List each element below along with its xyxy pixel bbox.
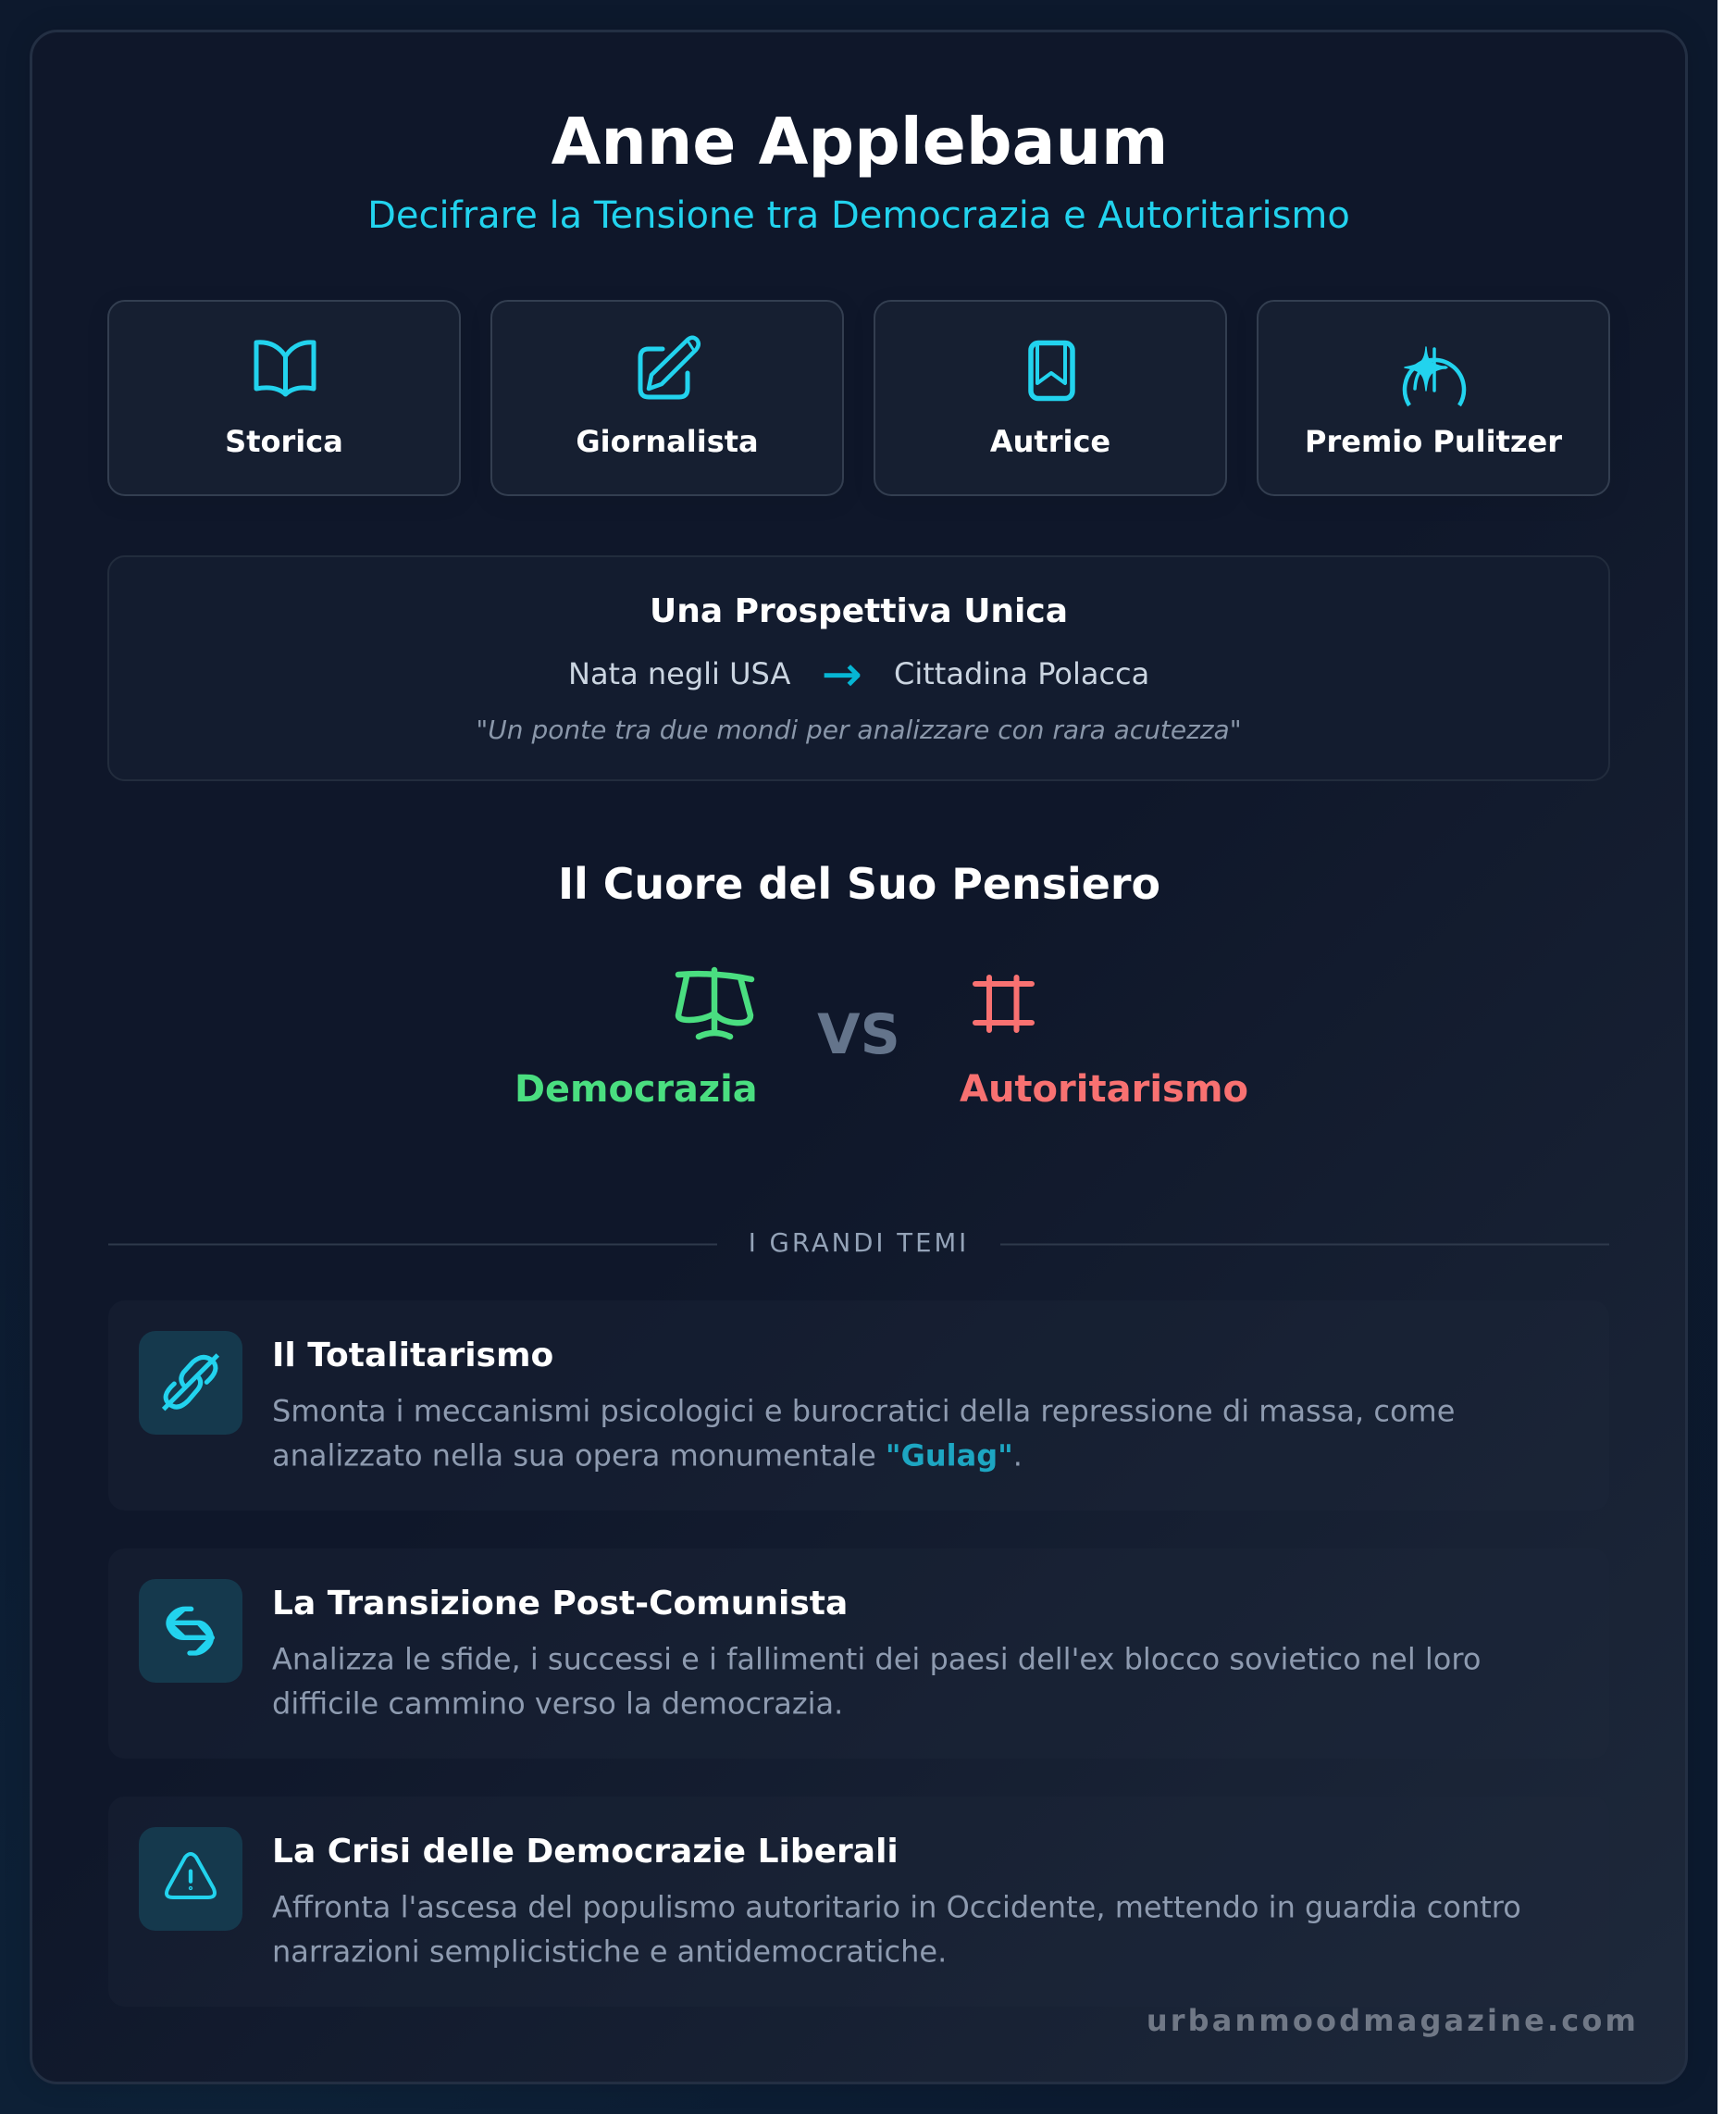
label: Storica: Storica (225, 424, 343, 459)
arrow: → (822, 647, 862, 703)
versus label: VS (817, 1002, 900, 1067)
origin text: Nata negli USA (568, 656, 790, 691)
subtitle: Decifrare la Tensione tra Democrazia e Autoritarismo (367, 194, 1350, 237)
label: Autrice: Autrice (990, 424, 1110, 459)
role card: Giornalista (491, 301, 843, 495)
icon box: arrows (139, 1579, 242, 1683)
comparison: authoritarianism (960, 977, 1248, 1111)
panel: una prospettiva unica (108, 556, 1609, 780)
label: Democrazia: Democrazia (515, 1068, 758, 1111)
label: Autoritarismo: Autoritarismo (960, 1068, 1248, 1111)
role card: Storica (108, 301, 460, 495)
theme: totalitarismo (108, 1300, 1609, 1511)
icon: pencil on square (640, 338, 699, 397)
theme: crisi: narrazioni semplicistiche e antidemocratiche. (272, 1934, 947, 1970)
heading: core of thought: Il Cuore del Suo Pensiero (558, 859, 1160, 909)
role card: Autrice (874, 301, 1226, 495)
role card: Premio Pulitzer (1258, 301, 1609, 495)
icon: bookmark (1031, 342, 1073, 398)
theme body: Smonta i meccanismi psicologici e burocratici della repressione di massa, come (272, 1394, 1455, 1429)
theme heading: Il Totalitarismo (272, 1337, 553, 1374)
theme: crisi (108, 1797, 1609, 2007)
comparison: democracy (515, 970, 758, 1111)
label: Premio Pulitzer: Premio Pulitzer (1305, 424, 1562, 459)
citizenship text: Cittadina Polacca (894, 656, 1149, 691)
watermark: urbanmoodmagazine.com (1147, 2003, 1639, 2038)
theme: transizione: difficile cammino verso la democrazia. (272, 1686, 843, 1722)
label: I GRANDI TEMI (749, 1228, 969, 1258)
title: Anne Applebaum (552, 105, 1168, 180)
theme heading: La Crisi delle Democrazie Liberali (272, 1833, 899, 1871)
theme body: Analizza le sfide, i successi e i fallimenti dei paesi dell'ex blocco sovietico nel loro (272, 1642, 1481, 1677)
theme: transizione (108, 1548, 1609, 1759)
theme heading: La Transizione Post-Comunista (272, 1585, 848, 1623)
label: Giornalista: Giornalista (576, 424, 759, 459)
icon: open book (256, 342, 314, 394)
icon: bars (975, 977, 1032, 1030)
icon: award star (1405, 347, 1464, 405)
theme body: Affronta l'ascesa del populismo autoritario in Occidente, mettendo in guardia contro (272, 1890, 1521, 1925)
icon box: chain (139, 1331, 242, 1435)
icon: scales (678, 970, 751, 1037)
icon box: warning (139, 1827, 242, 1931)
theme: totalitarismo: analizzato nella sua opera monumentale "Gulag". (272, 1438, 1023, 1474)
heading: Una Prospettiva Unica (650, 592, 1068, 630)
quote: "Un ponte tra due mondi per analizzare con rara acutezza" (476, 715, 1242, 745)
